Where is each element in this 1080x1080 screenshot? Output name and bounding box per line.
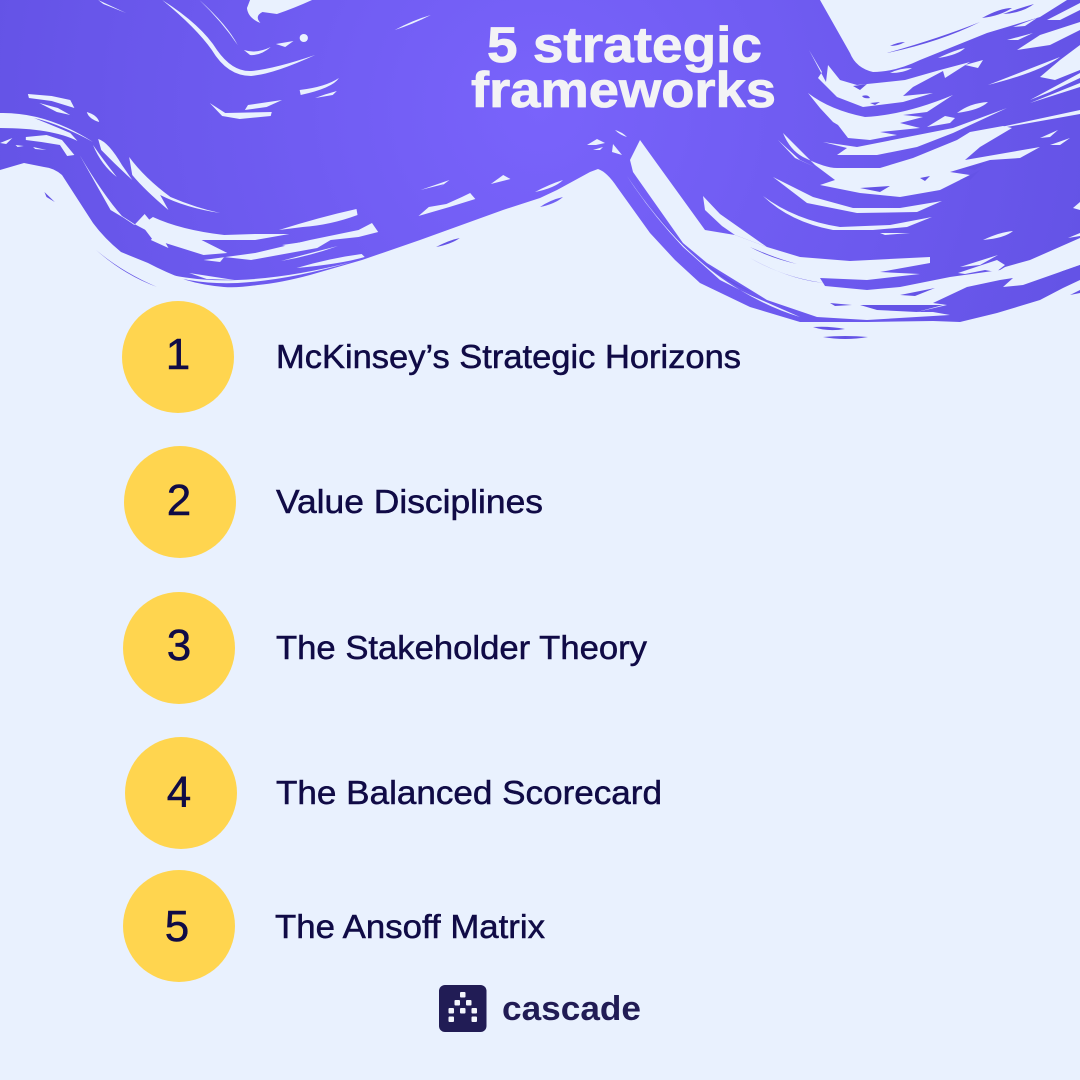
list item 1 <box>122 301 741 413</box>
cascade logo <box>439 985 641 1032</box>
label 1: McKinsey’s Strategic Horizons <box>276 338 741 375</box>
number badge 1: 1 <box>166 330 190 379</box>
title: 5 strategic <box>487 17 762 73</box>
label 3: The Stakeholder Theory <box>276 629 648 666</box>
number badge 2: 2 <box>167 476 191 525</box>
right brush streaks <box>535 3 1080 320</box>
list item 5 <box>123 870 546 982</box>
label 5: The Ansoff Matrix <box>275 908 546 945</box>
number badge 1 <box>122 301 234 413</box>
brush stroke banner <box>0 0 1080 339</box>
label 2: Value Disciplines <box>276 483 543 520</box>
number badge 4 <box>125 737 237 849</box>
number badge 3 <box>123 592 235 704</box>
number badge 3: 3 <box>167 621 191 670</box>
number badge 5: 5 <box>165 902 189 951</box>
list item 4 <box>125 737 662 849</box>
wordmark: cascade <box>502 990 641 1028</box>
left brush streaks <box>0 0 510 287</box>
list item 2 <box>124 446 543 558</box>
number badge 2 <box>124 446 236 558</box>
title <box>471 17 776 118</box>
label 4: The Balanced Scorecard <box>276 774 662 811</box>
number badge 4: 4 <box>167 768 191 817</box>
list item 3 <box>123 592 648 704</box>
number badge 5 <box>123 870 235 982</box>
title: frameworks <box>471 62 776 118</box>
icon: cascade mark <box>439 985 486 1032</box>
